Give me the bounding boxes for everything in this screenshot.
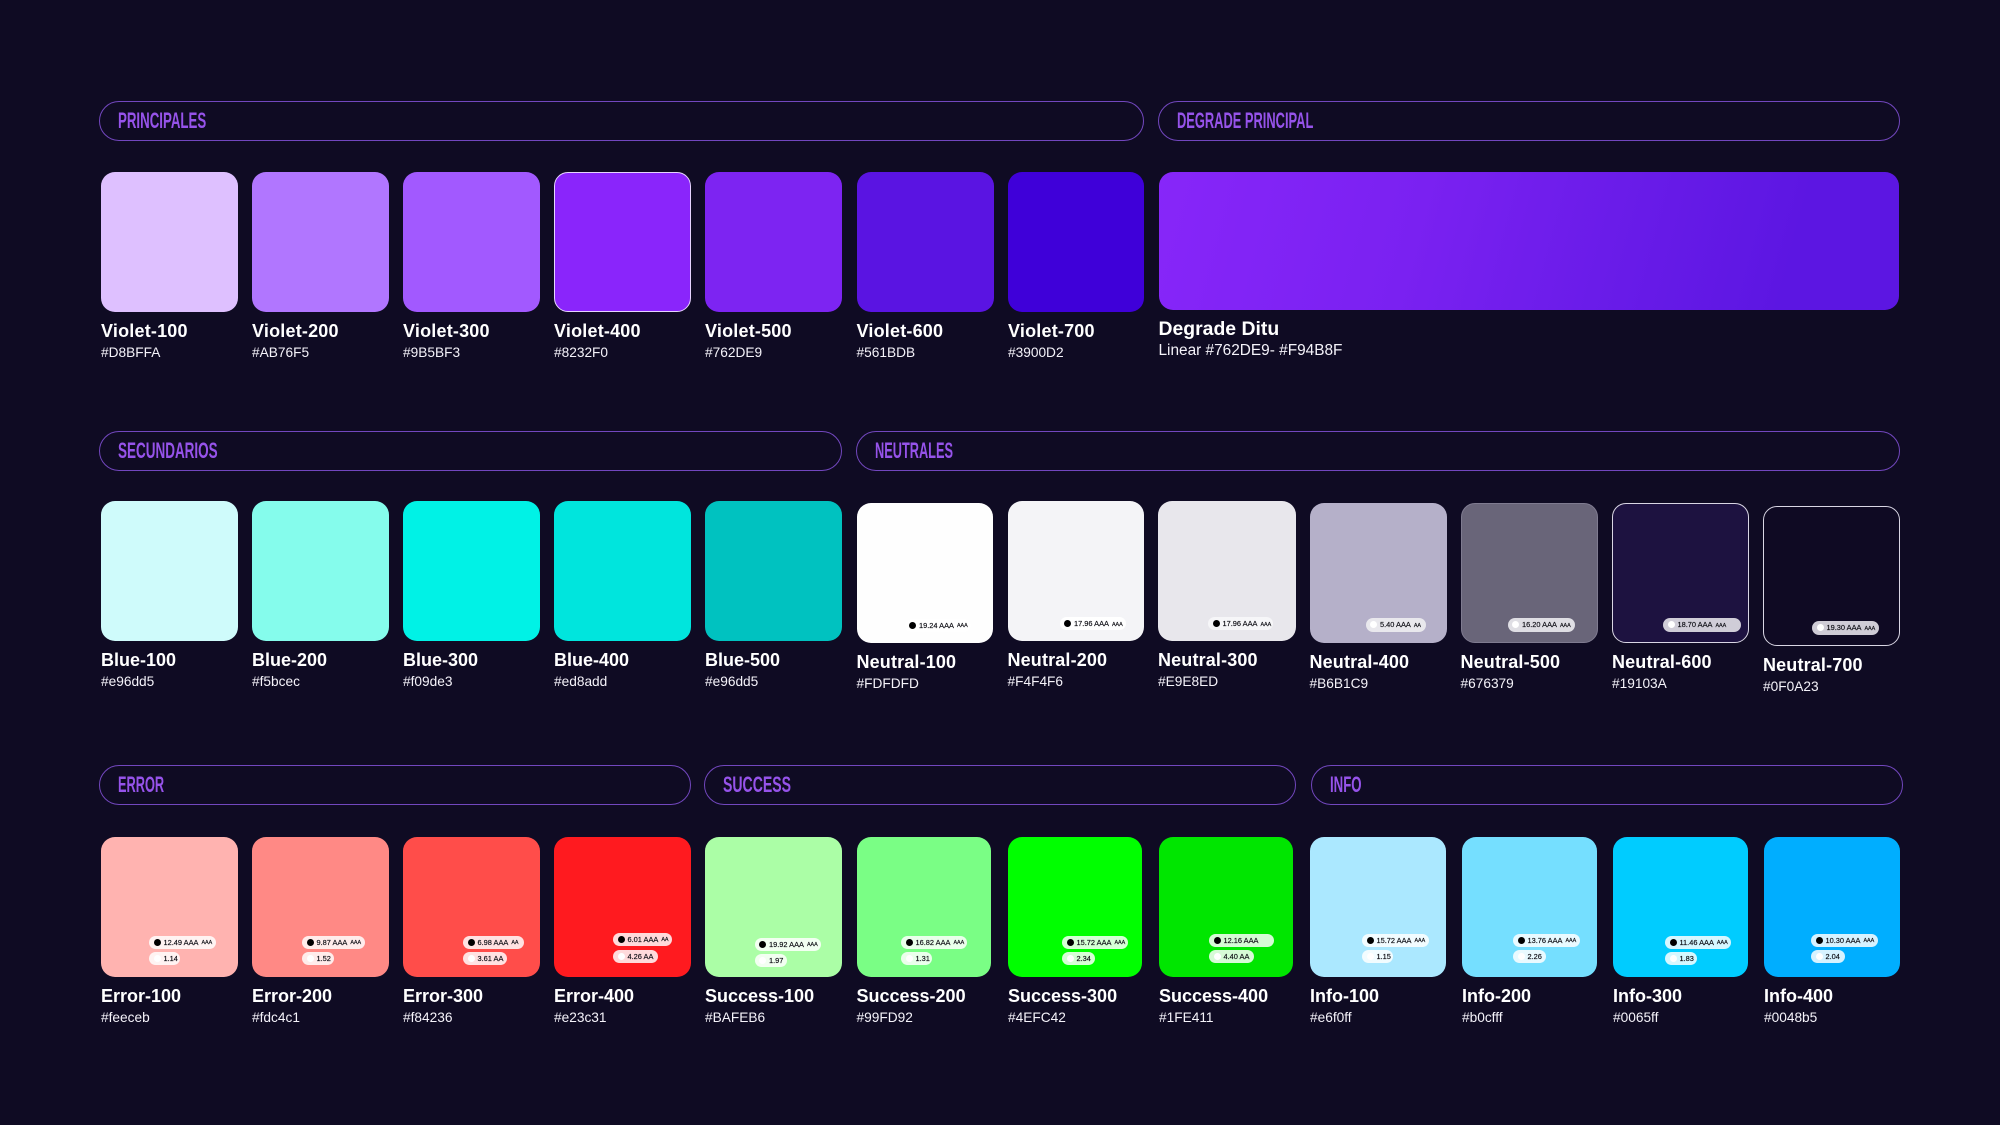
swatch: Violet-600 — [856, 172, 994, 360]
swatch: Error-200: 1.52 — [316, 954, 331, 962]
swatch: Info-100: Info-100 — [1310, 986, 1379, 1006]
swatch: Neutral-100 — [856, 503, 993, 691]
contrast badges: 9.87 AAA AAA — [316, 938, 361, 946]
swatch: Info-100 — [1310, 837, 1446, 1024]
contrast badges: 6.98 AAA AA — [478, 938, 519, 946]
contrast badge — [1663, 618, 1741, 632]
swatch: Error-100 — [101, 837, 238, 1024]
swatch: Success-400: #1FE411 — [1159, 1010, 1214, 1024]
contrast badge: 17.96 AAA AAA — [1222, 619, 1271, 628]
swatch: Neutral-300: #E9E8ED — [1158, 674, 1218, 689]
contrast badges: 16.82 AAA AAA — [916, 938, 964, 946]
heading: Degrade principal: DEGRADE PRINCIPAL — [1176, 108, 1313, 133]
swatch: Success-400 — [1159, 837, 1293, 1024]
swatch: Success-300: #4EFC42 — [1008, 1010, 1066, 1024]
contrast badges — [1665, 936, 1731, 948]
contrast badge — [1366, 618, 1426, 632]
swatch: Blue-400: #ed8add — [554, 674, 607, 689]
swatch: Neutral-200: #F4F4F6 — [1008, 674, 1063, 689]
swatch: Neutral-300 — [1158, 501, 1296, 689]
swatch: Neutral-600: #19103A — [1612, 676, 1667, 691]
contrast badges — [1062, 936, 1128, 948]
swatch: Neutral-400: Neutral-400 — [1310, 652, 1409, 672]
swatch: Violet-600: Violet-600 — [856, 321, 943, 341]
contrast badges — [463, 936, 524, 948]
swatch: Success-100: Success-100 — [705, 986, 814, 1006]
swatch: Neutral-400 — [1310, 503, 1447, 691]
swatch: Violet-200 — [252, 172, 389, 360]
swatch: Degrade Ditu gradient — [1158, 172, 1899, 359]
swatch: Violet-700: Violet-700 — [1008, 321, 1095, 341]
swatch: Neutral-200 — [1008, 501, 1144, 689]
contrast badges — [1209, 934, 1274, 946]
swatch: Violet-400: Violet-400 — [554, 321, 641, 341]
swatch: Error-300: Error-300 — [403, 986, 483, 1006]
contrast badges: 10.30 AAA AAA — [1826, 936, 1874, 944]
swatch: Blue-100: Blue-100 — [101, 650, 176, 670]
swatch: Blue-500 — [705, 501, 842, 689]
contrast badge: 18.70 AAA AAA — [1678, 620, 1726, 629]
swatch: Success-300 — [1008, 837, 1142, 1024]
heading: Success: SUCCESS — [722, 772, 791, 797]
contrast badges: 6.01 AAA AA — [628, 934, 669, 944]
swatch: Neutral-500 — [1460, 503, 1598, 691]
swatch: Violet-400: #8232F0 — [554, 345, 608, 360]
swatch: Violet-200: Violet-200 — [252, 321, 339, 341]
contrast badges — [302, 936, 365, 948]
heading: Neutrales — [856, 431, 1900, 471]
swatch: Success-100: #BAFEB6 — [705, 1010, 765, 1024]
contrast badges — [149, 936, 216, 948]
swatch: Neutral-100: Neutral-100 — [856, 652, 956, 672]
contrast badges: 15.72 AAA AAA — [1376, 936, 1425, 944]
contrast badges: 12.49 AAA AAA — [164, 938, 212, 946]
swatch: Neutral-400: #B6B1C9 — [1310, 676, 1368, 691]
heading: Error: ERROR — [118, 772, 164, 797]
swatch: Neutral-600 — [1612, 503, 1749, 691]
contrast badge: 19.24 AAA AAA — [919, 620, 968, 630]
swatch: Error-400: 4.26 AA — [628, 952, 653, 960]
contrast badges: 11.46 AAA AAA — [1680, 938, 1728, 946]
heading: Info: INFO — [1330, 772, 1361, 797]
contrast badges: 15.72 AAA AAA — [1076, 938, 1125, 946]
swatch: Blue-200: Blue-200 — [252, 650, 327, 670]
swatch: Info-100: 1.15 — [1376, 952, 1391, 960]
heading: Info — [1311, 765, 1903, 805]
heading: Secundarios: SECUNDARIOS — [118, 438, 217, 463]
contrast badge: 5.40 AAA AA — [1380, 620, 1421, 629]
swatch: Error-300: #f84236 — [403, 1010, 452, 1024]
swatch: Info-200 — [1462, 837, 1597, 1024]
swatch: Neutral-600: Neutral-600 — [1612, 652, 1712, 672]
swatch: Blue-200 — [252, 501, 389, 689]
swatch: Error-200: Error-200 — [252, 986, 332, 1006]
swatch: Violet-600: #561BDB — [856, 345, 915, 360]
heading: Success — [704, 765, 1296, 805]
contrast badge — [1208, 617, 1273, 630]
swatch: Success-100: 1.97 — [769, 956, 783, 964]
gradient name: Degrade Ditu — [1158, 318, 1279, 340]
contrast badge — [1508, 618, 1574, 632]
swatch: Success-400: Success-400 — [1159, 986, 1268, 1006]
swatch: Violet-300: #9B5BF3 — [403, 345, 460, 360]
swatch: Info-100: #e6f0ff — [1310, 1010, 1352, 1024]
swatch: Error-400: Error-400 — [554, 986, 634, 1006]
swatch: Success-200 — [856, 837, 991, 1024]
swatch: Info-200: 2.26 — [1528, 952, 1542, 960]
swatch: Blue-100: #e96dd5 — [101, 674, 154, 689]
swatch: Error-200 — [252, 837, 389, 1024]
swatch: Error-100: Error-100 — [101, 986, 181, 1006]
swatch: Error-200: #fdc4c1 — [252, 1010, 300, 1024]
swatch: Neutral-100: #FDFDFD — [856, 676, 919, 691]
heading: Principales — [99, 101, 1144, 141]
swatch: Blue-400 — [554, 501, 691, 689]
swatch: Violet-500: Violet-500 — [705, 321, 792, 341]
swatch: Blue-500: #e96dd5 — [705, 674, 758, 689]
swatch: Error-400: #e23c31 — [554, 1010, 607, 1024]
swatch: Neutral-700: #0F0A23 — [1763, 679, 1819, 694]
contrast badges — [1513, 934, 1580, 946]
heading: Secundarios — [99, 431, 842, 471]
contrast badges — [1362, 934, 1429, 946]
swatch: Violet-300 — [403, 172, 540, 360]
contrast badge — [904, 618, 970, 632]
contrast badges — [613, 932, 672, 946]
swatch: Success-200: #99FD92 — [856, 1010, 913, 1024]
swatch: Info-200: Info-200 — [1462, 986, 1531, 1006]
swatch: Info-200: #b0cfff — [1462, 1010, 1503, 1024]
swatch: Error-300: 3.61 AA — [478, 954, 503, 962]
heading: Error — [99, 765, 691, 805]
swatch: Violet-100: Violet-100 — [101, 321, 188, 341]
contrast badge — [1060, 617, 1126, 630]
contrast badges: 19.92 AAA AAA — [769, 940, 818, 948]
swatch: Blue-300: #f09de3 — [403, 674, 452, 689]
swatch: Blue-300 — [403, 501, 540, 689]
contrast badge: 17.96 AAA AAA — [1074, 619, 1123, 628]
swatch: Neutral-700: Neutral-700 — [1763, 655, 1863, 675]
swatch: Neutral-500: Neutral-500 — [1460, 652, 1560, 672]
swatch: Blue-500: Blue-500 — [705, 650, 780, 670]
swatch: Violet-100 — [101, 172, 238, 360]
swatch: Neutral-300: Neutral-300 — [1158, 650, 1258, 670]
swatch: Success-200: Success-200 — [856, 986, 966, 1006]
swatch: Error-400 — [554, 837, 691, 1024]
swatch: Success-300: Success-300 — [1008, 986, 1117, 1006]
contrast badges — [754, 938, 821, 950]
swatch: Error-100: #feeceb — [101, 1010, 150, 1024]
contrast badge — [1812, 621, 1879, 635]
swatch: Neutral-500: #676379 — [1460, 676, 1514, 691]
heading: Neutrales: NEUTRALES — [874, 438, 952, 463]
swatch: Violet-300: Violet-300 — [403, 321, 490, 341]
swatch: Violet-700 — [1008, 172, 1144, 360]
swatch: Info-400: Info-400 — [1764, 986, 1833, 1006]
swatch: Neutral-200: Neutral-200 — [1008, 650, 1107, 670]
swatch: Blue-200: #f5bcec — [252, 674, 300, 689]
swatch: Violet-200: #AB76F5 — [252, 345, 309, 360]
swatch: Blue-100 — [101, 501, 238, 689]
contrast badges: 13.76 AAA AAA — [1528, 936, 1576, 944]
swatch: Violet-400 — [554, 172, 691, 360]
swatch: Violet-500 — [705, 172, 842, 360]
heading: Principales: PRINCIPALES — [118, 108, 206, 133]
contrast badge: 16.20 AAA AAA — [1522, 620, 1571, 629]
swatch: Info-300 — [1613, 837, 1748, 1024]
swatch: Info-400: #0048b5 — [1764, 1010, 1817, 1024]
gradient bar — [1159, 172, 1899, 310]
swatch: Success-400: 4.40 AA — [1224, 952, 1249, 960]
swatch: Info-300: Info-300 — [1613, 986, 1682, 1006]
gradient definition: Linear #762DE9- #F94B8F — [1158, 342, 1342, 359]
swatch: Error-300 — [403, 837, 540, 1024]
contrast badges — [1811, 934, 1878, 946]
swatch: Error-100: 1.14 — [164, 954, 178, 962]
swatch: Info-400 — [1764, 837, 1900, 1024]
swatch: Success-300: 2.34 — [1076, 954, 1091, 962]
swatch: Blue-300: Blue-300 — [403, 650, 478, 670]
swatch: Neutral-700 — [1763, 506, 1900, 694]
contrast badge: 19.30 AAA AAA — [1826, 623, 1875, 632]
swatch: Info-300: 1.83 — [1680, 954, 1694, 962]
swatch: Info-300: #0065ff — [1613, 1010, 1658, 1024]
heading: Degrade principal — [1158, 101, 1900, 141]
contrast badges: 12.16 AAA — [1224, 936, 1258, 944]
swatch: Violet-700: #3900D2 — [1008, 345, 1064, 360]
swatch: Info-400: 2.04 — [1826, 952, 1840, 960]
swatch: Success-200: 1.31 — [916, 954, 930, 962]
swatch: Blue-400: Blue-400 — [554, 650, 629, 670]
contrast badges — [901, 936, 967, 948]
swatch: Violet-500: #762DE9 — [705, 345, 762, 360]
swatch: Violet-100: #D8BFFA — [101, 345, 160, 360]
swatch: Success-100 — [705, 837, 842, 1024]
